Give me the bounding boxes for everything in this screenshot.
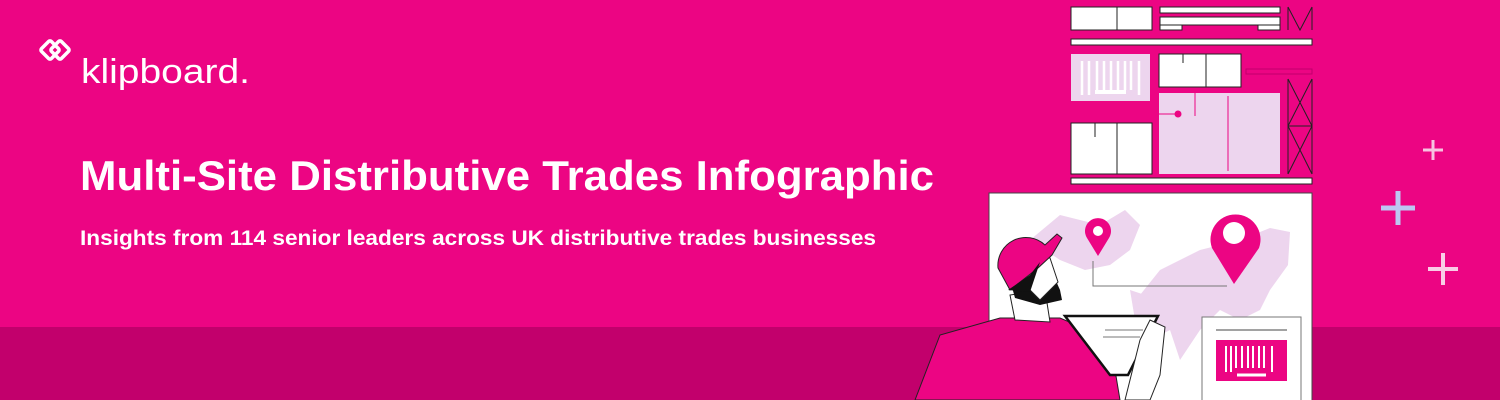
icon: small pin — [1085, 218, 1111, 256]
icon: logo mark — [40, 40, 70, 60]
map shapes — [1030, 210, 1290, 360]
logo — [40, 40, 250, 91]
illustration: warehouse shelves — [1071, 7, 1312, 184]
barcode panel — [1202, 317, 1301, 400]
illustration: map board — [989, 193, 1312, 400]
icon: large pin — [1210, 214, 1260, 284]
illustration: man with tablet — [915, 234, 1165, 400]
logo text: klipboard. — [81, 53, 250, 91]
subtitle: Insights from 114 senior leaders across UK distributive trades businesses — [80, 227, 876, 250]
title: Multi-Site Distributive Trades Infographic — [80, 152, 934, 199]
decoration: plus signs — [1381, 140, 1458, 285]
